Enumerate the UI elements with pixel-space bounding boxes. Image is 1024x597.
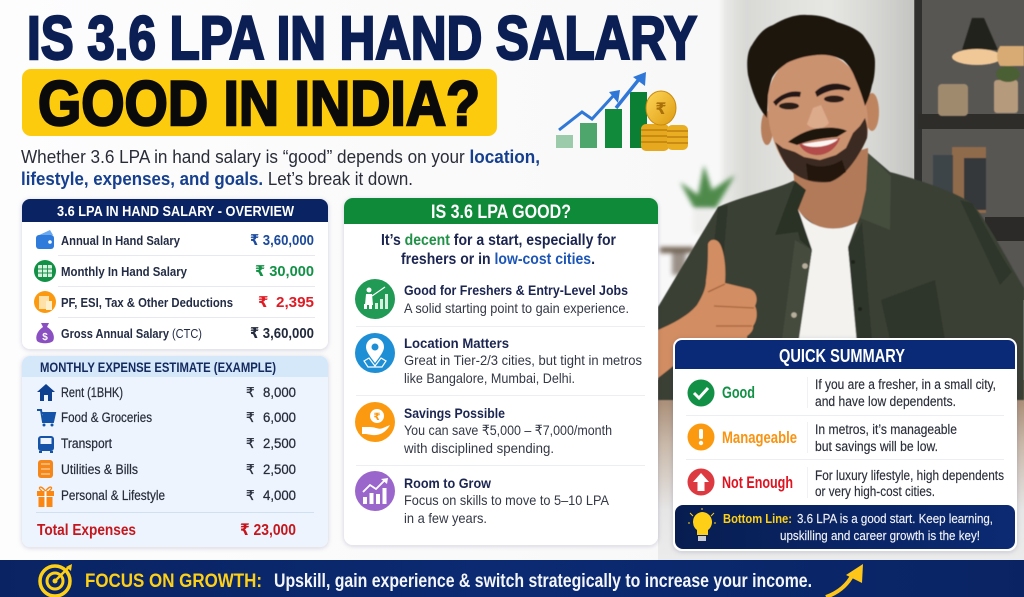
row: rent: 8,000 xyxy=(263,385,296,400)
title highlight: good in India: GOOD IN INDIA? xyxy=(38,69,480,139)
verdict text: It’s decent for a start, especially for xyxy=(381,232,616,249)
row: deductions: PF, ESI, Tax & Other Deductions xyxy=(61,295,233,310)
verdict text xyxy=(381,232,616,268)
item: freshers xyxy=(355,279,629,319)
item: freshers: A solid starting point to gain experience. xyxy=(404,300,629,316)
moustache xyxy=(788,128,847,145)
row: total expenses: Total Expenses xyxy=(37,522,136,539)
item: savings: with disciplined spending. xyxy=(403,440,554,456)
row: personal and lifestyle xyxy=(37,487,296,507)
overview header: 3.6 LPA IN HAND SALARY - OVERVIEW xyxy=(57,203,295,220)
bottom banner xyxy=(0,560,1024,597)
row: utilities and bills xyxy=(38,460,296,478)
hair xyxy=(747,15,875,118)
row: personal and lifestyle: 4,000 xyxy=(263,488,296,503)
status: not enough: Not Enough xyxy=(722,473,793,492)
quick summary header xyxy=(675,340,1015,369)
status: manageable xyxy=(688,422,957,454)
mouth and teeth xyxy=(799,138,840,155)
row: rent xyxy=(37,384,296,401)
row: utilities and bills: ₹ xyxy=(246,462,255,477)
status: good: and have low dependents. xyxy=(815,394,956,409)
hand with thumb up xyxy=(658,240,757,378)
quick summary header: QUICK SUMMARY xyxy=(779,346,905,366)
status: not enough: or very high-cost cities. xyxy=(815,484,935,499)
bottom line callout: upskilling and career growth is the key! xyxy=(780,528,980,543)
status: good: Good xyxy=(722,383,755,402)
row: gross annual salary: $ xyxy=(42,332,48,343)
good panel header xyxy=(344,198,658,224)
neck xyxy=(793,148,868,232)
row: annual in hand salary: Annual In Hand Salary xyxy=(61,233,181,248)
item: savings: ₹ xyxy=(374,412,381,423)
status: not enough xyxy=(688,468,1004,499)
row: deductions: 2,395 xyxy=(276,294,314,311)
row: deductions: ₹ xyxy=(258,294,268,311)
row: utilities and bills: Utilities & Bills xyxy=(61,462,138,477)
arrow: upward growth xyxy=(826,564,863,597)
table xyxy=(658,380,1024,597)
row: personal and lifestyle: Personal & Lifestyle xyxy=(61,488,165,503)
item: location: like Bangalore, Mumbai, Delhi. xyxy=(404,370,575,386)
good panel header: IS 3.6 LPA GOOD? xyxy=(431,202,571,223)
row: transport: ₹ xyxy=(246,436,255,451)
expense header: MONTHLY EXPENSE ESTIMATE (EXAMPLE) xyxy=(40,359,276,375)
row: monthly in hand salary: ₹ 30,000 xyxy=(255,263,314,280)
item: room to grow: Room to Grow xyxy=(404,475,491,491)
item: room to grow: in a few years. xyxy=(404,510,487,526)
title xyxy=(22,4,697,139)
shirt xyxy=(658,153,1024,400)
row: monthly in hand salary: Monthly In Hand Salary xyxy=(61,264,188,279)
overview header xyxy=(22,199,328,222)
bottom line callout: Bottom Line: xyxy=(723,511,792,526)
panel: monthly expense estimate xyxy=(22,356,328,547)
row: rent: ₹ xyxy=(246,385,255,400)
face xyxy=(768,52,868,182)
panel: salary overview xyxy=(22,199,328,349)
item: location: Great in Tier-2/3 cities, but tight in metros xyxy=(404,352,642,368)
bottom line callout: 3.6 LPA is a good start. Keep learning, xyxy=(797,511,993,526)
row: food and groceries: ₹ xyxy=(246,410,255,425)
row: deductions xyxy=(34,291,314,313)
item: room to grow xyxy=(355,471,610,526)
row: transport: Transport xyxy=(61,436,112,451)
item: location xyxy=(355,333,642,386)
row: gross annual salary xyxy=(36,323,314,343)
row: annual in hand salary xyxy=(36,230,314,249)
status: good xyxy=(688,377,996,409)
icon: light bulb xyxy=(688,508,716,541)
status: manageable: but savings will be low. xyxy=(815,439,938,454)
row: utilities and bills: 2,500 xyxy=(263,462,296,477)
item: savings: Savings Possible xyxy=(404,405,505,421)
row: rent: Rent (1BHK) xyxy=(61,385,123,400)
row: gross annual salary: Gross Annual Salary (CTC) xyxy=(61,326,202,341)
item: location: Location Matters xyxy=(404,335,509,351)
row: food and groceries: 6,000 xyxy=(263,410,296,425)
row: total expenses: ₹ 23,000 xyxy=(240,522,296,539)
intro text: Whether 3.6 LPA in hand salary is “good” depends on your location, xyxy=(21,146,540,167)
item: savings: You can save ₹5,000 – ₹7,000/month xyxy=(404,422,612,438)
row: transport xyxy=(38,436,296,453)
item: freshers: Good for Freshers & Entry-Level Jobs xyxy=(404,282,628,298)
row: gross annual salary: ₹ 3,60,000 xyxy=(250,325,314,342)
status: manageable: Manageable xyxy=(722,428,797,447)
eyes and brows xyxy=(773,91,801,106)
row: monthly in hand salary xyxy=(34,260,314,282)
bottom banner: Upskill, gain experience & switch strategically to increase your income. xyxy=(274,571,812,592)
row: personal and lifestyle: ₹ xyxy=(246,488,255,503)
ears xyxy=(761,111,773,145)
row: annual in hand salary: ₹ 3,60,000 xyxy=(250,232,314,249)
row: food and groceries: Food & Groceries xyxy=(61,410,152,425)
beard xyxy=(775,118,867,182)
photo: man giving thumbs up in home office xyxy=(658,0,1024,597)
verdict text: freshers or in low-cost cities. xyxy=(401,251,595,268)
intro text xyxy=(21,146,540,189)
bottom banner: FOCUS ON GROWTH: xyxy=(85,571,262,592)
panel: quick summary xyxy=(673,338,1017,551)
icon: growth chart with coins xyxy=(556,72,688,151)
status: manageable: In metros, it’s manageable xyxy=(815,422,957,437)
collar xyxy=(775,181,812,250)
t-shirt xyxy=(798,209,857,345)
panel: is 3.6 LPA good xyxy=(344,198,658,545)
bottom line callout xyxy=(675,505,1015,549)
plant xyxy=(660,165,735,275)
row: transport: 2,500 xyxy=(263,436,296,451)
icon: growth chart with coins: ₹ xyxy=(655,101,667,118)
placket and pocket xyxy=(782,240,812,340)
intro text: lifestyle, expenses, and goals. Let’s break it down. xyxy=(21,168,413,189)
title: IS 3.6 LPA IN HAND SALARY xyxy=(27,4,697,72)
icon: target xyxy=(40,564,72,596)
status: good: If you are a fresher, in a small city, xyxy=(815,377,996,392)
item: savings xyxy=(355,402,612,456)
item: room to grow: Focus on skills to move to 5–10 LPA xyxy=(404,492,610,508)
row: food and groceries xyxy=(37,410,296,426)
row: total expenses xyxy=(37,522,296,539)
